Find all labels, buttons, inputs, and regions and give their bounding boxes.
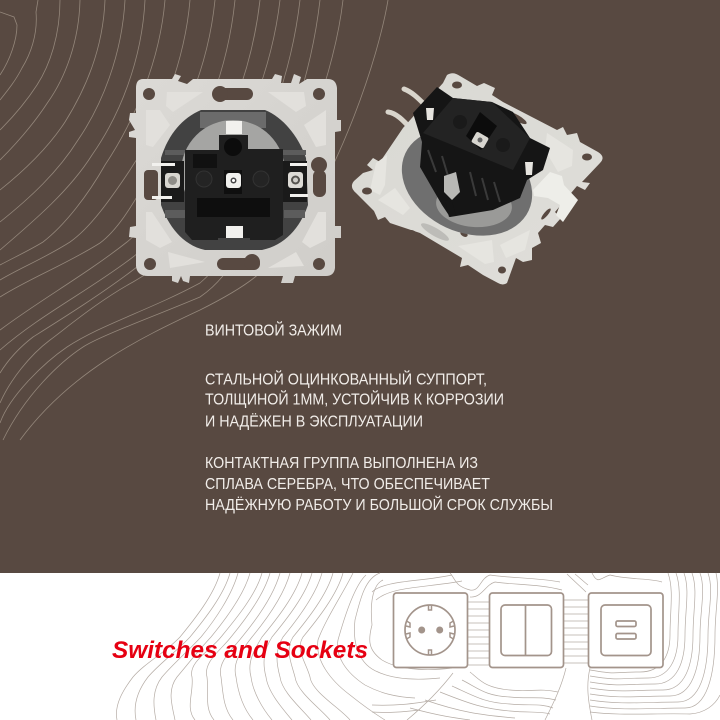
grey opening [384,108,550,256]
feature: galvanized steel support: ТОЛЩИНОЙ 1ММ, УСТОЙЧИВ К КОРРОЗИИ [205,390,504,408]
black body [185,135,283,240]
feature: silver alloy contact group: НАДЁЖНУЮ РАБОТУ И БОЛЬШОЙ СРОК СЛУЖБЫ [205,495,553,514]
photo: socket mechanism angled view [352,73,603,284]
feature: galvanized steel support [205,370,504,430]
mounting plate [352,73,603,284]
screw recess [466,112,497,150]
feature: galvanized steel support: СТАЛЬНОЙ ОЦИНКОВАННЫЙ СУППОРТ, [205,370,487,388]
plate facets [370,133,573,264]
contact clips and wire bars [152,121,308,238]
feature: galvanized steel support: И НАДЁЖЕН В ЭКСПЛУАТАЦИИ [205,412,423,430]
contour lines on white footer [116,573,720,720]
metal contact clip [444,172,460,200]
front contact strip [533,172,578,222]
plate embossed facets [146,92,326,268]
feature: screw terminal: ВИНТОВОЙ ЗАЖИМ [205,320,342,340]
text block: features [205,320,553,514]
plate holes [362,82,592,274]
terminals [161,161,184,202]
body top surface [423,98,530,170]
feature: silver alloy contact group: КОНТАКТНАЯ ГРУППА ВЫПОЛНЕНА ИЗ [205,455,478,472]
label recess [197,198,270,217]
icon: socket [394,593,468,668]
photo: socket mechanism front view [129,74,341,283]
panel: brown background [0,0,720,573]
grey inner disc [181,120,285,224]
title: Switches and Sockets [112,637,368,664]
plate mounting holes [143,86,327,270]
front face ridges [428,150,500,202]
feature: silver alloy contact group: СПЛАВА СЕРЕБРА, ЧТО ОБЕСПЕЧИВАЕТ [205,476,490,493]
icon: double switch [490,593,564,668]
contour lines on brown background [0,0,388,440]
black body [413,87,550,217]
wires [388,89,426,129]
screws [426,108,533,175]
screws [165,172,303,188]
dark opening [161,110,308,250]
icon: USB outlet [588,593,663,668]
feature: silver alloy contact group [205,455,553,514]
CE mark box [193,154,217,168]
panel: white footer [0,573,720,720]
mounting plate [129,74,341,283]
